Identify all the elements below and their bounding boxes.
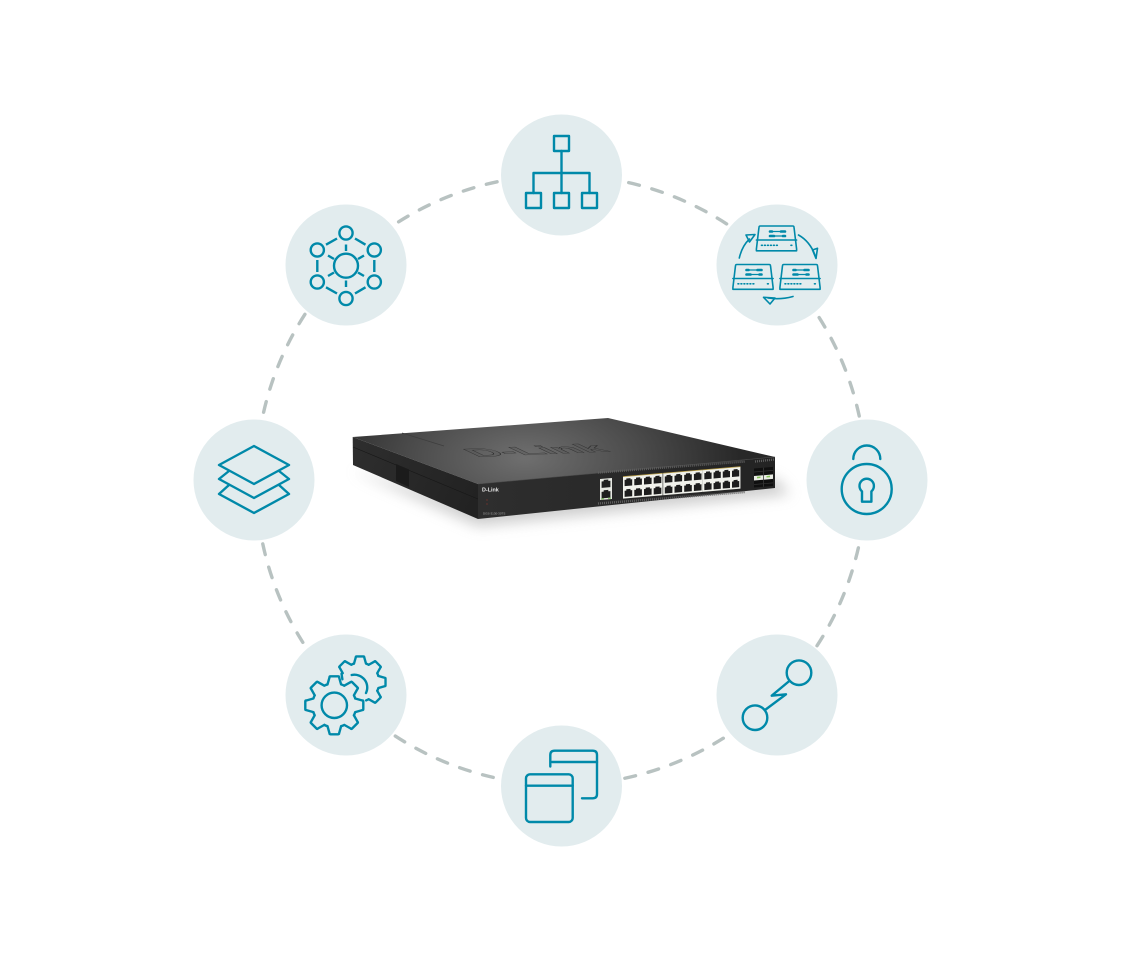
product: network switch xyxy=(352,418,790,526)
front panel xyxy=(478,457,775,519)
embossed logo on lid: D-Link xyxy=(456,441,616,460)
node: security xyxy=(806,420,928,540)
icon: stacked layers xyxy=(219,446,289,513)
icon: network hierarchy tree xyxy=(526,136,597,208)
node: mesh xyxy=(286,204,406,326)
front panel branding: D-Link xyxy=(482,488,499,494)
icon: hexagonal mesh xyxy=(311,226,381,305)
icon: padlock xyxy=(842,446,892,514)
switch left side xyxy=(353,437,478,519)
node: gears xyxy=(286,634,406,756)
SFP ports xyxy=(754,467,773,488)
node: stacked switches xyxy=(716,204,838,326)
vent perforations xyxy=(598,460,774,504)
front panel branding xyxy=(482,488,505,516)
switch top face xyxy=(353,418,775,484)
node: hierarchy xyxy=(501,114,622,236)
node: windows xyxy=(501,726,622,846)
node: link xyxy=(716,634,838,756)
icon: two gears xyxy=(305,656,386,734)
front panel branding: DGS-3130-30TS xyxy=(483,512,505,516)
icon: three switches in a cycle xyxy=(733,226,820,304)
RJ45 port groups xyxy=(623,466,740,499)
switch shadow xyxy=(352,470,790,526)
node: layers xyxy=(194,420,314,540)
icon: overlapping windows xyxy=(526,751,597,822)
icon: linked nodes xyxy=(743,660,811,730)
uplink ports xyxy=(600,478,612,500)
dashed ring xyxy=(256,175,866,785)
